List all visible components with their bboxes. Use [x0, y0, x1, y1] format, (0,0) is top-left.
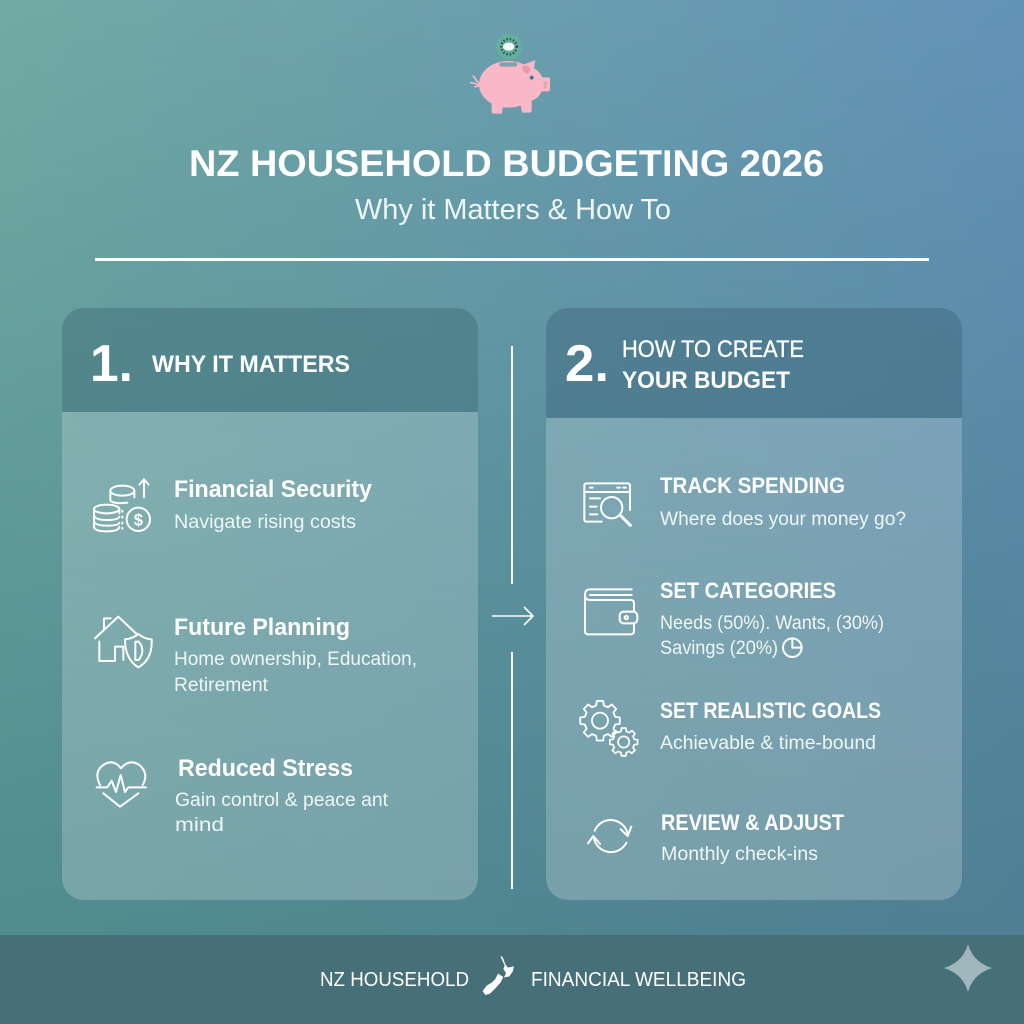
item title: Future Planning	[174, 614, 350, 641]
title divider	[95, 258, 929, 261]
item: reduced stress	[97, 755, 393, 836]
item title: REVIEW & ADJUST	[661, 810, 845, 835]
panel body	[62, 412, 478, 900]
icon: gears	[580, 701, 638, 756]
icon: coins with dollar and arrow: $	[134, 510, 144, 529]
icon: piggy bank with kiwi coin	[471, 34, 550, 114]
item: set realistic goals	[580, 698, 881, 756]
item description: Retirement	[174, 675, 269, 696]
subtitle: Why it Matters & How To	[355, 194, 671, 226]
footer text right: FINANCIAL WELLBEING	[531, 969, 746, 991]
icon: four-point star	[944, 944, 992, 992]
panel: why it matters	[62, 308, 478, 900]
panel header	[62, 308, 478, 412]
item title: Financial Security	[174, 476, 373, 503]
item title: SET REALISTIC GOALS	[660, 698, 881, 723]
item: future planning	[95, 614, 422, 696]
panel heading: HOW TO CREATE	[622, 336, 804, 363]
item: track spending	[584, 473, 906, 530]
section number 1: 1.	[90, 335, 133, 393]
icon: heart with pulse	[97, 762, 146, 807]
arrow	[492, 607, 533, 625]
panel body	[546, 418, 962, 900]
item: financial security	[94, 476, 373, 533]
item description: Achievable & time-bound	[660, 733, 876, 754]
panel: how to create your budget	[546, 308, 962, 900]
title: NZ HOUSEHOLD BUDGETING 2026	[189, 143, 824, 184]
footer text left: NZ HOUSEHOLD	[320, 969, 469, 991]
icon: pig body	[471, 60, 550, 114]
section number 2: 2.	[565, 335, 609, 393]
panel header	[546, 308, 962, 418]
icon: house and shield	[95, 617, 152, 667]
footer band	[0, 935, 1024, 1024]
panel heading: WHY IT MATTERS	[152, 351, 350, 378]
center divider and arrow	[492, 346, 533, 889]
item description: Home ownership, Education,	[174, 649, 417, 670]
item: review and adjust	[588, 810, 845, 865]
item description: Needs (50%). Wants, (30%)	[660, 613, 884, 634]
icon: refresh arrows	[588, 820, 631, 852]
item: set categories	[585, 578, 889, 659]
item title: Reduced Stress	[178, 755, 353, 782]
icon: New Zealand map	[483, 956, 514, 995]
panel heading: YOUR BUDGET	[622, 367, 790, 394]
item description: mind	[175, 815, 224, 836]
icon: browser window with magnifier	[584, 483, 630, 525]
item description: Savings (20%)	[660, 638, 778, 659]
icon: wallet	[585, 589, 637, 634]
icon: kiwi coin	[496, 34, 522, 60]
icon: coins with dollar and arrow	[94, 479, 150, 531]
item title: TRACK SPENDING	[660, 473, 845, 498]
item description: Where does your money go?	[660, 509, 906, 530]
icon: pie chart	[783, 638, 802, 657]
item description: Navigate rising costs	[174, 512, 356, 533]
item description: Monthly check-ins	[661, 844, 818, 865]
item description: Gain control & peace ant	[175, 790, 389, 811]
item title: SET CATEGORIES	[660, 578, 836, 603]
